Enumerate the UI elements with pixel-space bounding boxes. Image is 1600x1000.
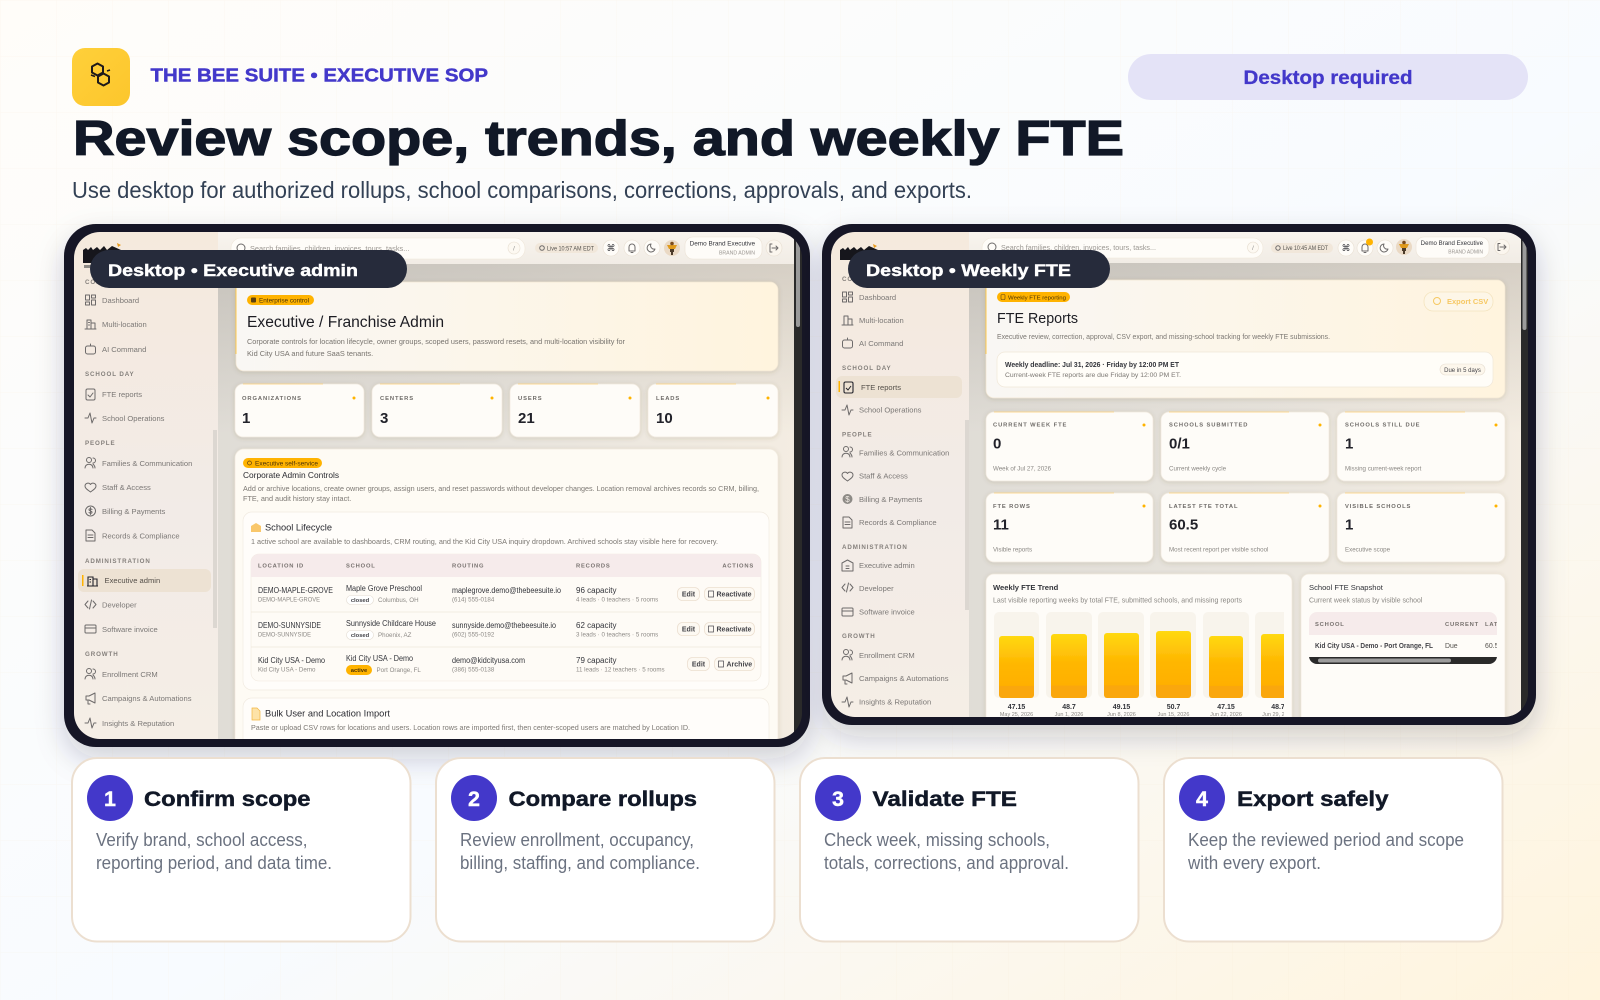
stat: organizations: 1 xyxy=(242,410,250,427)
nav: families: Families & Communication xyxy=(859,448,949,458)
row: kid city: active xyxy=(351,668,368,674)
step number 4: 4 xyxy=(1196,787,1208,811)
row: kid city: 11 leads · 12 teachers · 5 rooms xyxy=(576,666,665,674)
stat: latest FTE total: LATEST FTE TOTAL xyxy=(1169,504,1238,510)
stat: users: USERS xyxy=(518,396,542,402)
bar: May 25 xyxy=(994,612,1039,718)
badge: desktop required: Desktop required xyxy=(1244,67,1412,89)
row: sunnyside: sunnyside.demo@thebeesuite.io xyxy=(452,621,556,630)
bar: Jun 8: Jun 8, 2026 xyxy=(1107,712,1136,718)
row: sunnyside: Reactivate xyxy=(716,626,752,634)
stat: schools submitted xyxy=(1161,412,1329,481)
chart: weekly FTE trend xyxy=(986,574,1301,734)
row: sunnyside: 3 leads · 0 teachers · 5 rooms xyxy=(576,632,658,638)
sidebar: COMMAND xyxy=(842,276,881,283)
row: sunnyside xyxy=(258,619,754,640)
nav: AI command xyxy=(842,338,903,348)
sidebar: SCHOOL DAY xyxy=(85,371,135,378)
stat: centers: 3 xyxy=(380,410,388,427)
stat: visible schools xyxy=(1337,493,1505,562)
nav: FTE reports active: FTE reports xyxy=(861,383,901,392)
hero card: Weekly FTE reporting xyxy=(1008,296,1066,302)
school lifecycle table xyxy=(243,512,769,690)
row: maple grove: DEMO-MAPLE-GROVE xyxy=(258,586,333,595)
sidebar: SCHOOL DAY xyxy=(842,365,892,372)
icon: brand logo xyxy=(840,244,878,260)
stat: current week FTE: 0 xyxy=(993,436,1001,452)
step number 1: 1 xyxy=(104,787,116,811)
nav: executive admin xyxy=(842,560,915,571)
nav: dashboard xyxy=(842,292,896,302)
corporate admin card: Corporate Admin Controls xyxy=(243,470,339,480)
scrollbar xyxy=(794,232,802,739)
school lifecycle table: LOCATION ID xyxy=(258,564,304,570)
label: desktop executive admin: Desktop • Executive admin xyxy=(108,262,358,280)
top bar: Live 10:45 AM EDT xyxy=(1283,246,1328,252)
stat: visible schools: Executive scope xyxy=(1345,546,1391,554)
step body: Verify brand, school access, xyxy=(96,830,308,850)
top bar: BRAND ADMIN xyxy=(1448,250,1483,256)
row: maple grove: maplegrove.demo@thebeesuite.io xyxy=(452,586,561,595)
stat: FTE rows xyxy=(986,493,1153,562)
step card 3 xyxy=(800,758,1138,942)
stat: FTE rows: Visible reports xyxy=(993,546,1032,554)
eyebrow: THE BEE SUITE • EXECUTIVE SOP xyxy=(150,65,488,86)
sidebar: ADMINISTRATION xyxy=(85,558,151,565)
row: maple grove: (614) 555-0184 xyxy=(452,596,495,604)
hero card: Kid City USA and future SaaS tenants. xyxy=(247,349,373,358)
hero card: Corporate controls for location lifecycle, owner groups, scoped users, password resets, and multi-location visibility for xyxy=(247,337,626,346)
school lifecycle table: ACTIONS xyxy=(722,564,754,570)
label: desktop weekly FTE: Desktop • Weekly FTE xyxy=(866,262,1071,280)
stat: schools submitted: SCHOOLS SUBMITTED xyxy=(1169,422,1248,428)
nav: staff: Staff & Access xyxy=(102,483,151,492)
row: maple grove: 4 leads · 0 teachers · 5 rooms xyxy=(576,596,658,604)
row: kid city: Kid City USA - Demo xyxy=(258,666,316,674)
top bar: / xyxy=(513,246,515,252)
stat: schools still due: Missing current-week report xyxy=(1345,466,1422,472)
bar: Jun 29 xyxy=(1255,612,1301,718)
nav: developer: Developer xyxy=(859,584,894,593)
step body: reporting period, and data time. xyxy=(96,853,332,873)
step number 3: 3 xyxy=(832,787,844,811)
sidebar: ADMINISTRATION xyxy=(842,544,908,551)
sidebar: PEOPLE xyxy=(85,440,116,447)
stat: organizations xyxy=(235,384,364,437)
bar: Jun 1 xyxy=(1046,612,1092,718)
stat: current week FTE xyxy=(986,412,1153,481)
stat: organizations: ORGANIZATIONS xyxy=(242,396,302,402)
stat: leads: LEADS xyxy=(656,396,680,402)
table: school FTE snapshot: School FTE Snapshot xyxy=(1309,583,1384,592)
badge: desktop required xyxy=(1128,54,1528,100)
top bar: ⌘ xyxy=(1342,243,1350,253)
step number 4 xyxy=(1179,775,1225,821)
nav: software invoice: Software invoice xyxy=(859,608,915,616)
stat: latest FTE total xyxy=(1161,493,1329,562)
row: kid city: 79 capacity xyxy=(576,656,616,665)
top bar: Search families, children, invoices, tours, tasks... xyxy=(1001,243,1156,252)
nav: software invoice: Software invoice xyxy=(102,625,158,634)
step body xyxy=(460,830,700,873)
hero card xyxy=(236,282,778,371)
top bar xyxy=(218,232,802,264)
step body: totals, corrections, and approval. xyxy=(824,853,1069,873)
step number 3 xyxy=(815,775,861,821)
top bar: ⌘ xyxy=(606,243,616,253)
stat cards xyxy=(986,412,1505,562)
title: Review scope, trends, and weekly FTE xyxy=(73,111,1124,166)
bulk import card: Bulk User and Location Import xyxy=(265,708,390,718)
weekly deadline box xyxy=(997,352,1493,387)
nav: families xyxy=(842,446,949,458)
weekly deadline box: Weekly deadline: Jul 31, 2026 · Friday by 12:00 PM ET xyxy=(1005,362,1180,369)
top bar: BRAND ADMIN xyxy=(719,250,755,256)
table: school FTE snapshot: CURRENT xyxy=(1445,622,1479,628)
row: kid city: Port Orange, FL xyxy=(376,667,421,674)
corporate admin card: Add or archive locations, create owner groups, assign users, and reset passwords without developer changes. Location removal archives records so CRM, billing, xyxy=(243,484,759,493)
stat: leads: 10 xyxy=(656,410,673,427)
bar: Jun 22 xyxy=(1203,612,1249,718)
nav: billing: $ xyxy=(845,495,850,504)
top bar: / xyxy=(1252,246,1254,252)
top bar: Search families, children, invoices, tours, tasks... xyxy=(250,244,409,253)
step card 1 xyxy=(72,758,410,942)
bar: Jun 29: 48.7 xyxy=(1271,704,1285,711)
sidebar: PEOPLE xyxy=(842,432,873,438)
table: school FTE snapshot: SCHOOL xyxy=(1315,622,1345,628)
step number 2 xyxy=(451,775,497,821)
hero card: Executive review, correction, approval, CSV export, and missing-school tracking for weekly FTE submissions. xyxy=(997,333,1330,341)
stat: current week FTE: Week of Jul 27, 2026 xyxy=(993,466,1052,472)
bar: Jun 1: 48.7 xyxy=(1062,704,1076,711)
school lifecycle table: 1 active school are available to dashboards, CRM routing, and the Kid City USA inquiry dropdown. Archived schools stay visible here for recovery. xyxy=(251,537,718,546)
nav: campaigns xyxy=(843,673,949,684)
row: sunnyside: Edit xyxy=(682,626,696,634)
nav: FTE reports active xyxy=(836,376,962,398)
step number 1 xyxy=(87,775,133,821)
step body: billing, staffing, and compliance. xyxy=(460,853,700,873)
nav: billing: Billing & Payments xyxy=(859,495,923,504)
nav: enrollment CRM: Enrollment CRM xyxy=(859,651,915,660)
bar: Jun 29: Jun 29, 2026 xyxy=(1262,712,1294,718)
stat: visible schools: 1 xyxy=(1345,516,1353,534)
row: sunnyside: Phoenix, AZ xyxy=(378,632,412,639)
row: maple grove: closed xyxy=(351,598,370,604)
table: school FTE snapshot: LATEST xyxy=(1485,622,1512,628)
nav: billing: Billing & Payments xyxy=(102,507,166,516)
chart: weekly FTE trend: Weekly FTE Trend xyxy=(993,583,1059,592)
row: sunnyside: DEMO-SUNNYSIDE xyxy=(258,621,321,630)
corporate admin card: FTE, and audit history stay intact. xyxy=(243,494,351,503)
table: school FTE snapshot xyxy=(1301,574,1512,734)
nav: dashboard: Dashboard xyxy=(102,296,139,305)
row: sunnyside: closed xyxy=(351,633,370,639)
label: desktop executive admin xyxy=(90,250,407,288)
bulk import card xyxy=(242,698,770,739)
panel: desktop executive admin screenshot xyxy=(64,224,810,768)
panel: desktop weekly FTE screenshot xyxy=(822,224,1536,734)
nav: multi-location: Multi-location xyxy=(859,316,904,325)
corporate admin card xyxy=(235,449,778,768)
stat: leads xyxy=(648,384,778,437)
nav: AI command: AI Command xyxy=(102,345,146,354)
hero card: FTE Reports xyxy=(997,310,1078,327)
row: sunnyside: 62 capacity xyxy=(576,621,616,630)
bar: Jun 8 xyxy=(1098,612,1144,718)
nav: school operations: School Operations xyxy=(859,406,922,414)
nav: enrollment CRM: Enrollment CRM xyxy=(102,670,158,679)
sidebar: COMMAND xyxy=(85,279,124,286)
row: maple grove: Reactivate xyxy=(716,592,752,598)
nav: FTE reports: FTE reports xyxy=(102,390,142,399)
button: export CSV xyxy=(1424,292,1493,311)
row: sunnyside: DEMO-SUNNYSIDE xyxy=(258,632,311,638)
nav: AI command: AI Command xyxy=(859,339,903,348)
school lifecycle table: RECORDS xyxy=(576,564,611,570)
step body xyxy=(1187,830,1464,873)
nav: multi-location: Multi-location xyxy=(102,320,147,329)
row: kid city: Archive xyxy=(726,662,752,668)
stat: schools still due: SCHOOLS STILL DUE xyxy=(1345,422,1420,428)
table: school FTE snapshot: Kid City USA - Demo - Port Orange, FL xyxy=(1315,643,1433,650)
chart: weekly FTE trend: Last visible reporting weeks by total FTE, submitted schools, and missing reports xyxy=(993,598,1243,604)
nav: families: Families & Communication xyxy=(102,459,192,468)
weekly deadline box: Due in 5 days xyxy=(1444,368,1481,374)
nav: records: Records & Compliance xyxy=(859,518,937,527)
step card 2 xyxy=(436,758,774,942)
stat: latest FTE total: Most recent report per visible school xyxy=(1169,546,1268,554)
bar: Jun 22: 47.15 xyxy=(1217,704,1235,711)
nav: insights: Insights & Reputation xyxy=(859,698,931,706)
school lifecycle table: School Lifecycle xyxy=(265,522,332,532)
nav: executive admin active: Executive admin xyxy=(104,576,160,585)
row: maple grove: DEMO-MAPLE-GROVE xyxy=(258,596,320,604)
nav: insights: Insights & Reputation xyxy=(102,719,174,728)
corporate admin card: Executive self-service xyxy=(255,462,319,468)
nav: enrollment CRM xyxy=(85,668,158,679)
nav: staff: Staff & Access xyxy=(859,472,908,480)
row: kid city: Edit xyxy=(692,662,706,668)
weekly deadline box: Current-week FTE reports are due Friday by 12:00 PM ET. xyxy=(1005,372,1181,379)
bar: May 25: 47.15 xyxy=(1008,704,1025,711)
nav: AI command xyxy=(86,344,146,354)
stat: FTE rows: 11 xyxy=(993,516,1009,534)
hero card xyxy=(986,280,1505,398)
bar: Jun 15 xyxy=(1150,612,1196,718)
bar: Jun 15: Jun 15, 2026 xyxy=(1158,712,1189,718)
row: kid city xyxy=(258,654,754,675)
bar: Jun 22: Jun 22, 2026 xyxy=(1210,712,1242,718)
nav: executive admin: Executive admin xyxy=(859,561,915,570)
row: kid city: (386) 555-0138 xyxy=(452,666,495,674)
stat: latest FTE total: 60.5 xyxy=(1169,516,1198,534)
sidebar: GROWTH xyxy=(85,651,119,658)
stat: schools submitted: Current weekly cycle xyxy=(1169,466,1227,472)
nav: dashboard: Dashboard xyxy=(859,293,896,302)
bar: Jun 1: Jun 1, 2026 xyxy=(1055,712,1083,718)
top bar: Live 10:57 AM EDT xyxy=(547,246,594,252)
hero card: Enterprise control xyxy=(259,298,309,304)
nav: enrollment CRM xyxy=(842,650,915,660)
table: school FTE snapshot: Due xyxy=(1445,643,1458,650)
nav: records: Records & Compliance xyxy=(102,532,180,540)
stat: users: 21 xyxy=(518,410,535,427)
nav: executive admin active xyxy=(78,569,211,592)
step body: Keep the reviewed period and scope xyxy=(1188,830,1464,850)
bar: Jun 15: 50.7 xyxy=(1167,704,1180,711)
bulk import card: Paste or upload CSV rows for locations and users. Location rows are imported first, then center-scoped users are matched by Location ID. xyxy=(251,723,690,732)
nav: school operations: School Operations xyxy=(102,414,165,423)
row: kid city: Kid City USA - Demo xyxy=(258,656,325,665)
stat cards xyxy=(235,384,778,437)
step body: with every export. xyxy=(1187,853,1321,873)
step body xyxy=(96,830,332,873)
step heading: Validate FTE xyxy=(872,788,1017,811)
top bar: Demo Brand Executive xyxy=(690,240,755,248)
row: sunnyside: (602) 555-0192 xyxy=(452,632,495,638)
nav: campaigns xyxy=(86,693,192,704)
step body xyxy=(824,830,1069,873)
bar: May 25: May 25, 2026 xyxy=(1000,712,1033,718)
step body: Check week, missing schools, xyxy=(824,830,1050,850)
stat: schools still due: 1 xyxy=(1345,436,1353,452)
bar: Jun 8: 49.15 xyxy=(1113,704,1130,711)
table: school FTE snapshot: 60.5 xyxy=(1485,643,1499,650)
icon: honeycomb logo xyxy=(72,48,130,106)
stat: schools still due xyxy=(1337,412,1505,481)
stat: schools submitted: 0/1 xyxy=(1169,436,1190,452)
top bar: Demo Brand Executive xyxy=(1421,240,1484,247)
step heading: Confirm scope xyxy=(144,788,310,811)
row: kid city: demo@kidcityusa.com xyxy=(452,656,525,665)
row: maple grove: Columbus, OH xyxy=(378,597,419,604)
label: desktop weekly FTE xyxy=(848,250,1110,288)
nav: developer: Developer xyxy=(102,600,137,610)
row: sunnyside: Sunnyside Childcare House xyxy=(346,619,436,628)
row: maple grove xyxy=(258,584,754,604)
stat: visible schools: VISIBLE SCHOOLS xyxy=(1345,504,1411,510)
step body: Review enrollment, occupancy, xyxy=(460,830,694,850)
step heading: Export safely xyxy=(1237,788,1389,811)
row: kid city: Kid City USA - Demo xyxy=(346,654,413,663)
school lifecycle table: SCHOOL xyxy=(346,564,376,570)
icon: brand logo xyxy=(83,243,121,268)
step card 4 xyxy=(1164,758,1502,942)
nav: campaigns: Campaigns & Automations xyxy=(102,694,192,703)
nav: records xyxy=(843,517,937,528)
row: maple grove: 96 capacity xyxy=(576,586,616,595)
hero card: Executive / Franchise Admin xyxy=(247,314,444,331)
top bar xyxy=(969,232,1528,263)
step number 2: 2 xyxy=(468,787,480,811)
stat: FTE rows: FTE ROWS xyxy=(993,504,1031,510)
school lifecycle table: ROUTING xyxy=(452,564,484,570)
sidebar xyxy=(831,232,969,717)
nav: developer xyxy=(842,583,894,593)
stat: users xyxy=(510,384,640,437)
row: maple grove: Maple Grove Preschool xyxy=(346,584,422,593)
subtitle: Use desktop for authorized rollups, school comparisons, corrections, approvals, and exports. xyxy=(72,177,972,203)
sidebar: GROWTH xyxy=(842,633,876,640)
nav: records xyxy=(86,530,180,541)
nav: FTE reports xyxy=(86,389,142,400)
sidebar xyxy=(74,232,218,739)
button: export CSV: Export CSV xyxy=(1447,297,1488,306)
stat: current week FTE: CURRENT WEEK FTE xyxy=(993,422,1067,428)
step heading: Compare rollups xyxy=(508,788,697,811)
row: maple grove: Edit xyxy=(682,592,696,598)
nav: dashboard xyxy=(86,295,139,305)
nav: developer xyxy=(85,600,137,610)
stat: centers: CENTERS xyxy=(380,396,414,402)
table: school FTE snapshot: Current week status by visible school xyxy=(1309,598,1423,604)
stat: centers xyxy=(372,384,502,437)
nav: campaigns: Campaigns & Automations xyxy=(859,674,949,683)
scrollbar xyxy=(1521,232,1528,717)
